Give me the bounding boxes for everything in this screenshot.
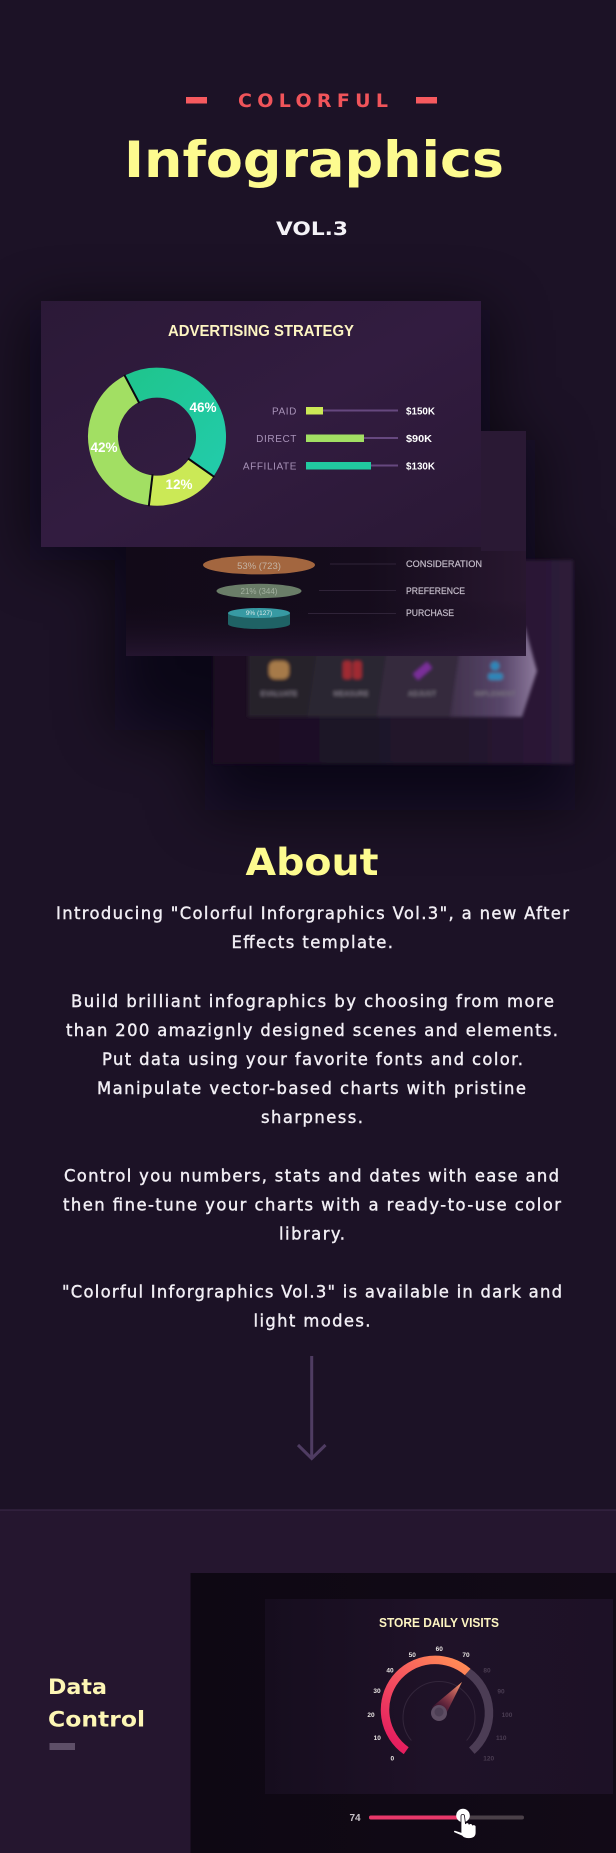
paragraph 1: Introducing "Colorful Inforgraphics Vol.3", a new After (56, 904, 569, 923)
donut values: 42% (90, 440, 118, 455)
red dash right (416, 97, 437, 104)
inactive tick labels: 120 (483, 1756, 495, 1762)
bar row: paid (272, 406, 435, 418)
active tick labels: 60 (436, 1646, 443, 1653)
bar chart (243, 406, 435, 472)
donut values: 12% (165, 477, 193, 492)
chevron strip (248, 627, 537, 717)
donut values (90, 400, 217, 492)
gauge value arc (385, 1660, 468, 1751)
icon: hand cursor (454, 1814, 476, 1838)
bar row: direct: DIRECT (256, 434, 297, 445)
leader lines (308, 564, 396, 614)
donut segment 42% (103, 389, 151, 490)
paragraph 4: light modes. (254, 1312, 370, 1330)
subtitle: VOL.3: VOL.3 (276, 219, 348, 240)
funnel layer 1 (203, 556, 315, 574)
icon: measure (343, 661, 362, 679)
active tick labels: 20 (367, 1712, 375, 1719)
inactive tick labels: 110 (496, 1735, 507, 1742)
donut segment 46% (132, 383, 211, 468)
donut separators (124, 375, 214, 506)
donut segment 12% (151, 468, 201, 491)
needle (432, 1682, 462, 1718)
bar row: affiliate: AFFILIATE (243, 462, 297, 472)
active tick labels: 30 (373, 1688, 381, 1695)
slider fill (369, 1816, 463, 1820)
donut chart (90, 375, 217, 506)
panel: gauge demo (190, 1573, 616, 1853)
hub (431, 1705, 447, 1721)
heading: Data Control: Data (48, 1675, 107, 1700)
funnel labels (406, 559, 482, 619)
heading: About: About (246, 841, 378, 884)
bar row: direct: $90K (406, 433, 432, 445)
paragraph 2 (66, 992, 558, 1127)
paragraph 2: Build brilliant infographics by choosing from more (71, 992, 554, 1011)
paragraph 3: Control you numbers, stats and dates with ease and (64, 1166, 559, 1186)
paragraph 2: Manipulate vector-based charts with pristine (97, 1079, 526, 1098)
heading: Data Control (48, 1675, 145, 1732)
panel: back slide, blurred process chevrons (213, 560, 573, 764)
active tick labels: 50 (409, 1652, 416, 1659)
paragraph 1 (56, 904, 569, 952)
paragraph 4 (62, 1282, 562, 1330)
bar row: paid: $150K (406, 406, 435, 418)
inactive tick labels: 90 (497, 1688, 505, 1696)
arrow: down (298, 1356, 326, 1458)
paragraph 3: library. (279, 1224, 345, 1244)
slider knob (456, 1809, 470, 1822)
gauge remaining arc (468, 1672, 489, 1751)
blurred labels (261, 691, 516, 698)
eyebrow: COLORFUL: COLORFUL (238, 90, 388, 112)
active tick labels: 70 (462, 1652, 470, 1659)
blurred labels: EVALUATE (261, 691, 298, 698)
gauge inner ring (403, 1681, 475, 1741)
active tick labels: 0 (390, 1756, 394, 1762)
panel: front slide, advertising strategy (41, 301, 481, 547)
gauge (367, 1646, 513, 1762)
header (124, 90, 504, 240)
slider (349, 1809, 524, 1838)
active tick labels: 10 (374, 1735, 381, 1742)
blurred labels: IMPLEMENT (474, 691, 516, 698)
section: data control (0, 1510, 616, 1853)
gauge title: STORE DAILY VISITS (379, 1615, 499, 1630)
bar row: affiliate: $130K (406, 460, 435, 472)
accent bar (50, 1743, 75, 1750)
paragraph 2: sharpness. (261, 1108, 363, 1127)
paragraph 1: Effects template. (232, 933, 393, 952)
funnel labels: PURCHASE (406, 608, 454, 619)
donut values: 46% (189, 400, 217, 415)
funnel labels: CONSIDERATION (406, 559, 482, 570)
heading: Data Control: Control (48, 1708, 145, 1732)
paragraph 3: then fine-tune your charts with a ready-to-use color (63, 1196, 561, 1214)
stacked slide previews (30, 301, 575, 810)
funnel labels: PREFERENCE (406, 586, 465, 597)
paragraph 4: "Colorful Inforgraphics Vol.3" is available in dark and (62, 1282, 562, 1302)
blurred labels: ADJUST (408, 691, 437, 698)
inactive tick labels: 100 (502, 1712, 513, 1719)
title: Infographics: Infographics (124, 131, 504, 189)
shadow behind slides (30, 310, 575, 810)
bar row: affiliate (243, 460, 435, 472)
inactive tick labels: 80 (483, 1668, 491, 1674)
slide title: ADVERTISING STRATEGY (168, 323, 355, 340)
slider value: 74 (349, 1813, 361, 1824)
paragraph 2: Put data using your favorite fonts and color. (102, 1050, 523, 1069)
funnel layer 3 (228, 608, 290, 629)
gauge slide (265, 1599, 613, 1794)
red dash left (186, 97, 207, 104)
paragraph 3 (63, 1166, 561, 1244)
bar row: direct (256, 433, 432, 445)
icon: implement (488, 662, 503, 680)
active tick labels (367, 1646, 470, 1762)
active tick labels: 40 (386, 1668, 394, 1674)
blurred labels: MEASURE (333, 691, 369, 698)
funnel layer 1: 53% (723) (237, 561, 281, 572)
funnel layer 2: 21% (344) (241, 587, 278, 596)
icon: adjust (413, 662, 432, 680)
inactive tick labels (483, 1668, 513, 1762)
about section (56, 841, 569, 1330)
funnel layer 3: 9% (127) (246, 610, 272, 617)
panel: middle slide, funnel (126, 431, 526, 656)
slider track (369, 1816, 524, 1820)
paragraph 2: than 200 amazignly designed scenes and elements. (66, 1021, 558, 1040)
section background (0, 1510, 616, 1853)
funnel layer 2 (216, 584, 302, 598)
bar row: paid: PAID (272, 406, 297, 418)
icon: evaluate (269, 661, 289, 679)
